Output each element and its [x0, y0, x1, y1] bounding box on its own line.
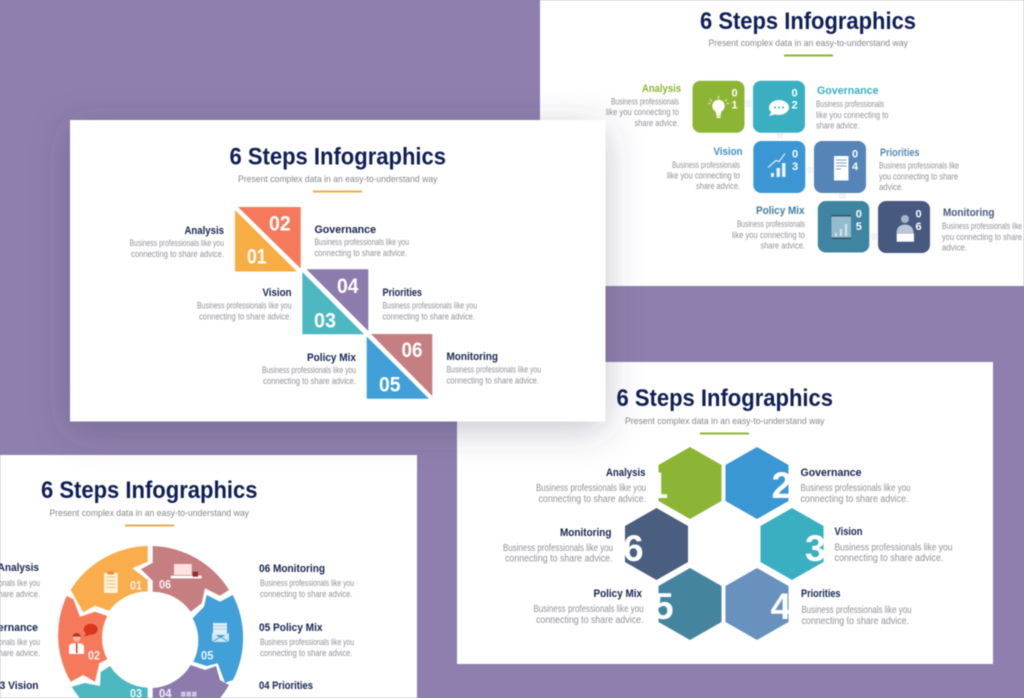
icon: speech bubble — [769, 100, 789, 116]
hexagon 4 — [724, 568, 790, 640]
icon: tablet chart — [832, 215, 851, 239]
step 01 square: 1 — [732, 100, 738, 112]
text: Vision: connecting to share advice. — [199, 312, 292, 322]
text: Monitoring: Business professionals like you — [446, 364, 541, 374]
hexagon 3 — [760, 508, 824, 580]
text: Analysis: Analysis — [642, 83, 681, 95]
hexagon 6 — [624, 508, 689, 580]
text: Governance: connecting to share advice. — [800, 494, 908, 505]
text: Monitoring: Business professionals like you — [503, 543, 613, 554]
text: Policy Mix: share advice. — [760, 240, 805, 250]
title: 6 Steps Infographics — [41, 477, 258, 504]
accent line — [700, 432, 749, 434]
text: Vision: connecting to share advice. — [834, 553, 944, 564]
ring segment 06 — [141, 546, 229, 612]
accent line — [784, 54, 833, 56]
text: Monitoring — [942, 207, 1022, 252]
text: Governance — [314, 224, 409, 258]
text: Policy Mix: Business professionals like you — [534, 604, 644, 615]
step 05 square: 0 — [856, 208, 862, 220]
text: 02 Governance — [0, 622, 40, 658]
text: Governance: Business professionals like you — [800, 483, 910, 494]
text: Vision: Vision — [834, 526, 863, 538]
text: Vision: like you connecting to — [667, 170, 740, 180]
text: Monitoring — [446, 351, 541, 386]
icon: light bulb — [708, 96, 729, 118]
text: Monitoring: Monitoring — [560, 527, 612, 539]
subtitle: Present complex data in an easy-to-understand way — [238, 174, 438, 184]
step 04 square: 4 — [852, 161, 859, 173]
hexagon 1 — [658, 446, 722, 520]
text: Priorities — [879, 147, 959, 192]
title: 6 Steps Infographics — [700, 8, 916, 35]
text: Vision: Business professionals — [672, 160, 740, 170]
text: Governance — [800, 467, 910, 505]
accent line — [125, 524, 174, 526]
text: Priorities: Priorities — [880, 147, 920, 159]
triangle 03 — [302, 272, 364, 334]
hexagon 4: 4 — [770, 586, 792, 627]
text: Vision: Business professionals like you — [834, 542, 952, 554]
accent line — [313, 190, 362, 192]
text: 01 Analysis — [0, 562, 40, 599]
triangle 01: 01 — [247, 246, 267, 268]
text: 05 Policy Mix — [259, 622, 354, 658]
step 04 square — [814, 141, 866, 193]
text: Analysis — [536, 467, 646, 505]
ring segment 01: 01 — [130, 578, 142, 592]
subtitle: Present complex data in an easy-to-understand way — [625, 416, 825, 426]
text: Governance — [816, 85, 888, 130]
text: Monitoring: connecting to share advice. — [505, 554, 612, 564]
text: Priorities: Business professionals like you — [802, 605, 912, 616]
text: Monitoring: advice. — [942, 242, 967, 252]
text: Analysis: connecting to share advice. — [538, 494, 646, 505]
text: Policy Mix: connecting to share advice. — [536, 615, 644, 626]
text: Analysis — [130, 225, 224, 259]
text: 05 Policy Mix: Business professionals like you — [260, 637, 354, 647]
text: Policy Mix: Policy Mix — [307, 352, 357, 364]
icon: envelope — [212, 623, 229, 642]
icon: person with speech bubble — [69, 624, 98, 654]
step 03 square: 3 — [792, 161, 798, 173]
title: 6 Steps Infographics — [616, 385, 833, 412]
icon: document — [834, 156, 848, 180]
panel: circular arrow steps — [0, 455, 417, 698]
text: Analysis: Business professionals like you — [130, 238, 224, 248]
text: Analysis — [606, 83, 681, 128]
text: Priorities: Priorities — [801, 588, 840, 600]
text: Policy Mix: Business professionals — [737, 219, 805, 229]
step 05 square — [818, 201, 869, 252]
text: Policy Mix — [732, 205, 805, 250]
hexagon 5 — [658, 568, 722, 640]
ring segment 04 — [153, 665, 229, 698]
text: Priorities: you connecting to share — [879, 172, 958, 182]
text: Policy Mix — [262, 352, 357, 386]
text: Governance: Governance — [800, 467, 862, 479]
text: Policy Mix: like you connecting to — [732, 230, 805, 240]
text: 05 Policy Mix: 05 Policy Mix — [259, 622, 323, 634]
hexagon 2 — [724, 446, 790, 520]
text: 06 Monitoring: connecting to share advice. — [260, 589, 352, 599]
text: Analysis: share advice. — [634, 118, 679, 128]
text: Monitoring: Monitoring — [446, 351, 498, 363]
step 06 square: 0 — [916, 208, 922, 220]
step 03 square — [753, 141, 805, 193]
triangle 03: 03 — [314, 310, 336, 333]
text: Vision: Vision — [714, 146, 743, 158]
text: Governance: share advice. — [816, 120, 860, 130]
text: Vision: Business professionals like you — [197, 300, 292, 310]
connectors — [745, 100, 877, 240]
step 01 square: 0 — [732, 88, 738, 100]
text: Policy Mix: Policy Mix — [594, 588, 643, 600]
text: Priorities: Priorities — [382, 287, 422, 299]
step 06 square — [878, 201, 930, 253]
hexagon 3: 3 — [805, 528, 826, 569]
text: Priorities — [801, 588, 912, 627]
icon: person at laptop — [896, 215, 914, 242]
ring segment 02: 02 — [88, 648, 100, 662]
hexagon 5: 5 — [653, 586, 674, 627]
text: Policy Mix: Policy Mix — [756, 205, 805, 217]
text: 06 Monitoring: Business professionals like you — [260, 578, 354, 588]
triangle 05 — [367, 336, 429, 399]
subtitle: Present complex data in an easy-to-understand way — [708, 38, 908, 48]
hexagon 2: 2 — [772, 465, 792, 506]
text: Analysis: connecting to share advice. — [131, 249, 224, 259]
text: Vision: share advice. — [696, 181, 740, 191]
text: Priorities — [382, 287, 477, 322]
panel: rounded square steps — [540, 0, 1024, 286]
step 02 square — [753, 81, 805, 133]
text: Governance: like you connecting to — [816, 110, 888, 120]
triangle 02 — [238, 207, 301, 268]
text: Policy Mix — [534, 588, 644, 626]
icon: grid — [181, 692, 196, 697]
step 04 square: 0 — [852, 148, 858, 160]
text: Priorities: connecting to share advice. — [382, 312, 475, 322]
text: Monitoring: Monitoring — [943, 207, 995, 219]
text: 05 Policy Mix: connecting to share advice. — [260, 648, 352, 658]
hexagon 6: 6 — [623, 528, 644, 569]
text: Priorities: advice. — [879, 182, 904, 192]
text: Analysis: Business professionals like you — [536, 483, 646, 494]
text: Monitoring — [503, 527, 613, 564]
text: Analysis: Analysis — [184, 225, 224, 237]
text: Priorities: Business professionals like you — [382, 300, 477, 310]
text: Vision — [197, 287, 292, 322]
step 05 square: 5 — [856, 221, 862, 233]
text: Analysis: Business professionals — [611, 96, 679, 106]
text: 06 Monitoring — [259, 563, 354, 599]
text: Governance: Business professionals like you — [314, 237, 409, 247]
panel: diagonal triangle steps — [70, 120, 606, 422]
text: Governance: Business professionals — [816, 99, 884, 109]
text: Vision — [667, 146, 743, 191]
ring segment 05: 05 — [201, 648, 214, 662]
title: 6 Steps Infographics — [230, 144, 446, 170]
panel: hexagon steps — [457, 362, 993, 664]
text: Governance: Governance — [314, 224, 376, 236]
triangle 02: 02 — [269, 213, 291, 236]
ring segment 01 — [71, 546, 148, 612]
step 01 square — [692, 81, 744, 133]
triangle 06 — [371, 334, 432, 396]
step 03 square: 0 — [792, 148, 798, 160]
icon: desktop monitor and cup — [171, 564, 202, 578]
text: Analysis: Analysis — [606, 467, 646, 479]
text: Priorities: connecting to share advice. — [802, 616, 909, 627]
text: Vision: Vision — [262, 287, 292, 299]
text: Governance: Governance — [817, 85, 878, 97]
step 02 square: 2 — [792, 100, 798, 112]
triangle 04: 04 — [337, 275, 359, 298]
triangle 05: 05 — [379, 374, 401, 397]
triangle 04 — [306, 269, 368, 331]
text: Policy Mix: Business professionals like you — [262, 365, 356, 375]
text: Policy Mix: connecting to share advice. — [263, 376, 356, 386]
text: 04 Priorities: 04 Priorities — [259, 680, 313, 692]
ring segment 05 — [193, 595, 243, 683]
text: Analysis: like you connecting to — [606, 107, 679, 117]
ring segment 06: 06 — [159, 578, 171, 592]
ring segment 02 — [58, 596, 107, 682]
step 02 square: 0 — [792, 88, 798, 100]
text: Governance: connecting to share advice. — [314, 248, 407, 258]
step 06 square: 6 — [916, 221, 922, 233]
text: Vision — [834, 526, 952, 564]
icon: clipboard — [104, 572, 118, 593]
triangle 01 — [235, 210, 297, 272]
text: Priorities: Business professionals like — [879, 160, 959, 170]
hexagon 1: 1 — [648, 465, 668, 506]
icon: growth chart — [768, 154, 786, 177]
triangle 06: 06 — [402, 339, 422, 362]
subtitle: Present complex data in an easy-to-understand way — [50, 508, 249, 518]
text: Monitoring: connecting to share advice. — [446, 376, 539, 386]
text: 06 Monitoring: 06 Monitoring — [259, 563, 325, 575]
ring segment 03 — [72, 666, 148, 698]
